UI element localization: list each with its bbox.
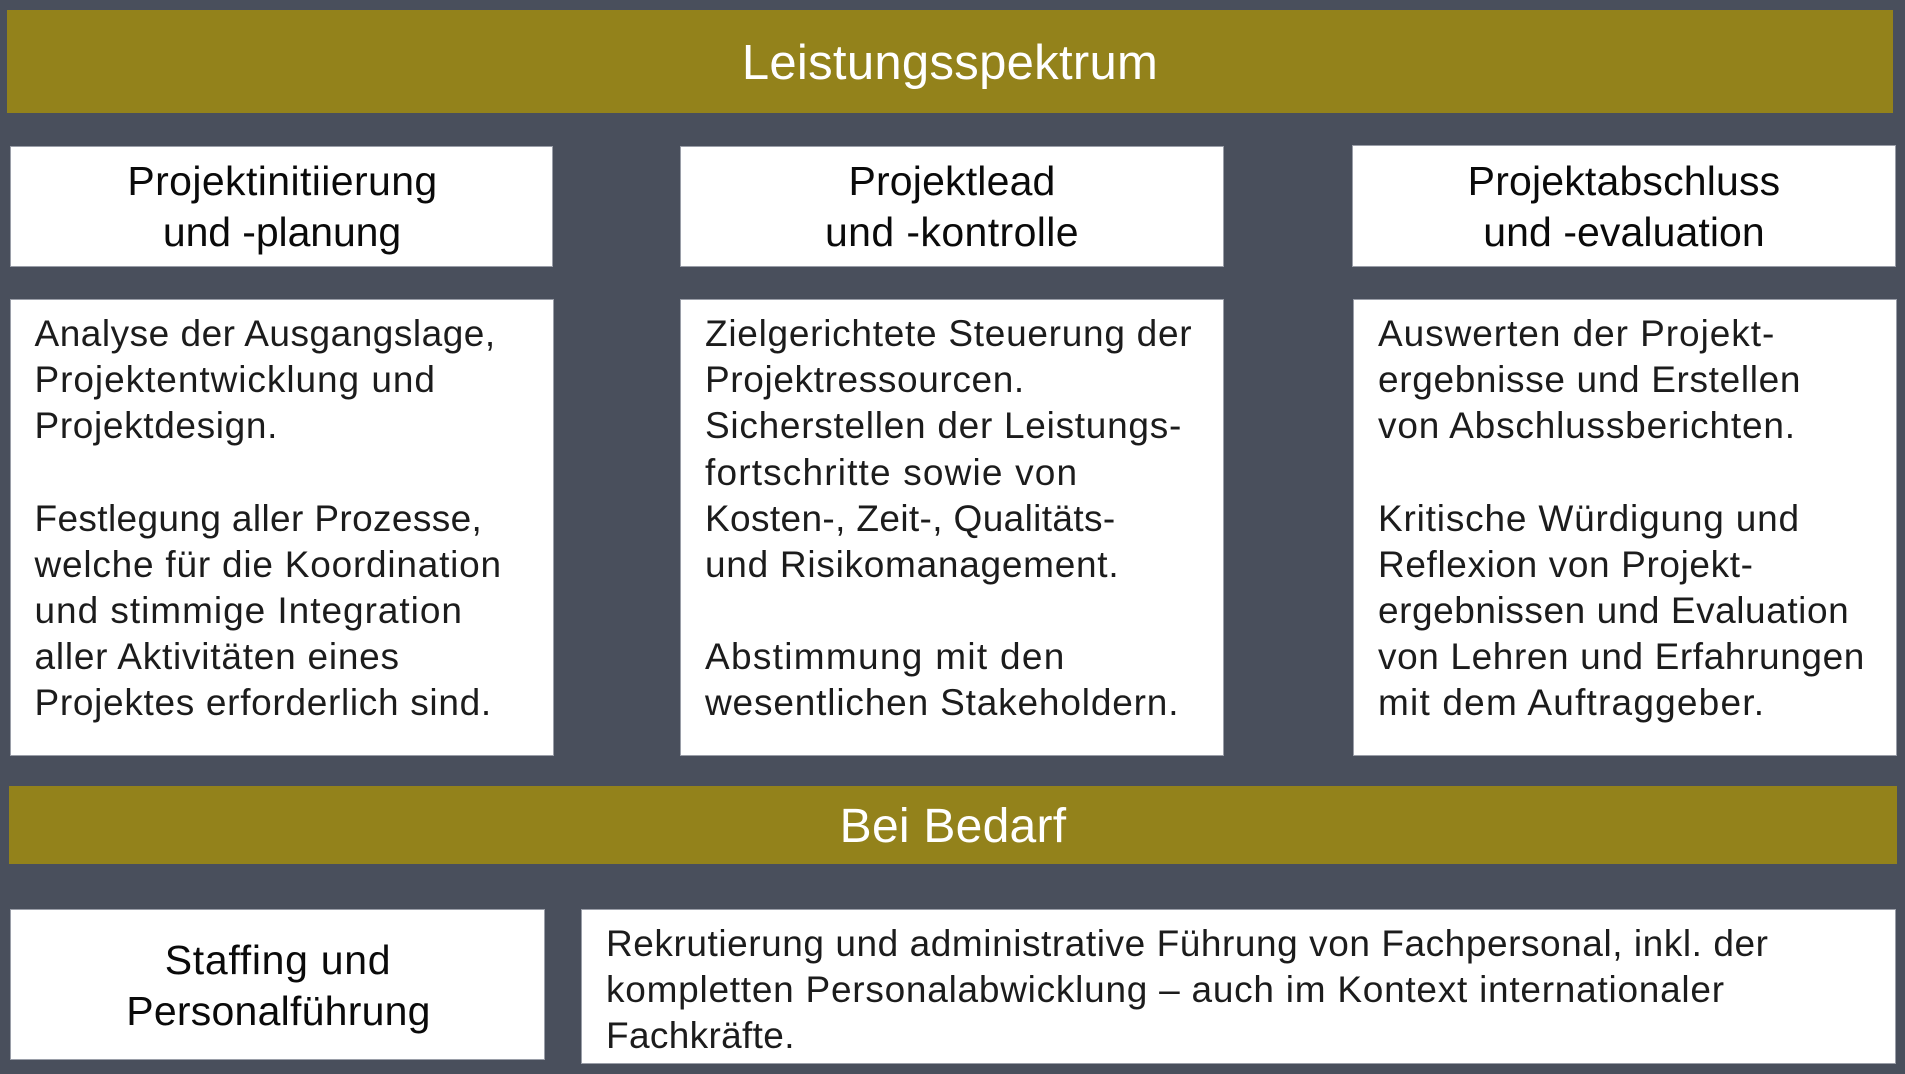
panel: text Staffing xyxy=(581,909,1896,1064)
text block: Projektlead description: Sicherstellen der Leistungs- xyxy=(705,405,1182,446)
text block: Projektabschluss description: mit dem Auftraggeber. xyxy=(1378,682,1765,723)
text block: Staffing description: Rekrutierung und administrative Führung von Fachpersonal, inkl. der xyxy=(606,923,1768,964)
panel: heading Projektlead xyxy=(680,146,1224,267)
panel: heading Projektabschluss: und -evaluation xyxy=(1483,209,1765,255)
title banner xyxy=(7,10,1893,113)
text block: Projektinitiierung description: und stimmige Integration xyxy=(34,590,463,631)
text block: Projektinitiierung description: Festlegung aller Prozesse, xyxy=(34,498,482,539)
text block: Projektlead description: wesentlichen Stakeholdern. xyxy=(705,682,1179,723)
text block: Projektabschluss description: von Abschlussberichten. xyxy=(1378,405,1796,446)
text block: Projektlead description: fortschritte sowie von xyxy=(705,452,1078,493)
text block: Staffing description xyxy=(606,923,1768,1056)
panel: text Projektlead xyxy=(680,299,1224,756)
text block: Staffing description: Fachkräfte. xyxy=(606,1015,795,1056)
panel: heading Staffing: Personalführung xyxy=(126,988,431,1034)
text block: Projektlead description: Zielgerichtete Steuerung der xyxy=(705,313,1192,354)
text block: Projektlead description xyxy=(705,313,1192,723)
section banner: Bei Bedarf: Bei Bedarf xyxy=(840,800,1066,853)
panel: text Projektabschluss xyxy=(1353,299,1897,756)
section banner: Bei Bedarf xyxy=(9,786,1897,864)
text block: Projektinitiierung description: Projektes erforderlich sind. xyxy=(34,682,492,723)
text block: Projektabschluss description: ergebnisse und Erstellen xyxy=(1378,359,1801,400)
panel: heading Projektabschluss xyxy=(1352,145,1896,267)
panel: heading Projektabschluss: Projektabschluss xyxy=(1468,158,1780,204)
text block: Projektabschluss description: von Lehren und Erfahrungen xyxy=(1378,636,1865,677)
text block: Projektinitiierung description: Analyse der Ausgangslage, xyxy=(34,313,496,354)
panel: heading Projektinitiierung: und -planung xyxy=(163,209,401,255)
text block: Projektinitiierung description: Projektdesign. xyxy=(34,405,278,446)
text block: Projektinitiierung description xyxy=(34,313,502,723)
text block: Projektlead description: Projektressourcen. xyxy=(705,359,1025,400)
panel: heading Projektinitiierung: Projektinitiierung xyxy=(127,158,438,204)
text block: Projektabschluss description: ergebnissen und Evaluation xyxy=(1378,590,1849,631)
text block: Projektlead description: Kosten-, Zeit-, Qualitäts- xyxy=(705,498,1116,539)
text block: Projektinitiierung description: welche für die Koordination xyxy=(34,544,502,585)
text block: Projektlead description: Abstimmung mit den xyxy=(705,636,1066,677)
panel: text Projektinitiierung xyxy=(10,299,554,756)
panel: heading Projektlead: Projektlead xyxy=(848,158,1056,204)
text block: Projektabschluss description: Auswerten der Projekt- xyxy=(1378,313,1775,354)
text block: Staffing description: kompletten Personalabwicklung – auch im Kontext internationaler xyxy=(606,969,1725,1010)
title banner: Leistungsspektrum xyxy=(742,36,1158,90)
panel: heading Staffing xyxy=(10,909,545,1060)
text block: Projektabschluss description: Reflexion von Projekt- xyxy=(1378,544,1754,585)
text block: Projektabschluss description: Kritische Würdigung und xyxy=(1378,498,1800,539)
text block: Projektinitiierung description: aller Aktivitäten eines xyxy=(34,636,400,677)
text block: Projektinitiierung description: Projektentwicklung und xyxy=(34,359,436,400)
panel: heading Staffing: Staffing und xyxy=(165,937,391,983)
text block: Projektabschluss description xyxy=(1378,313,1865,723)
panel: heading Projektinitiierung xyxy=(10,146,553,267)
panel: heading Projektlead: und -kontrolle xyxy=(825,209,1079,255)
text block: Projektlead description: und Risikomanagement. xyxy=(705,544,1119,585)
